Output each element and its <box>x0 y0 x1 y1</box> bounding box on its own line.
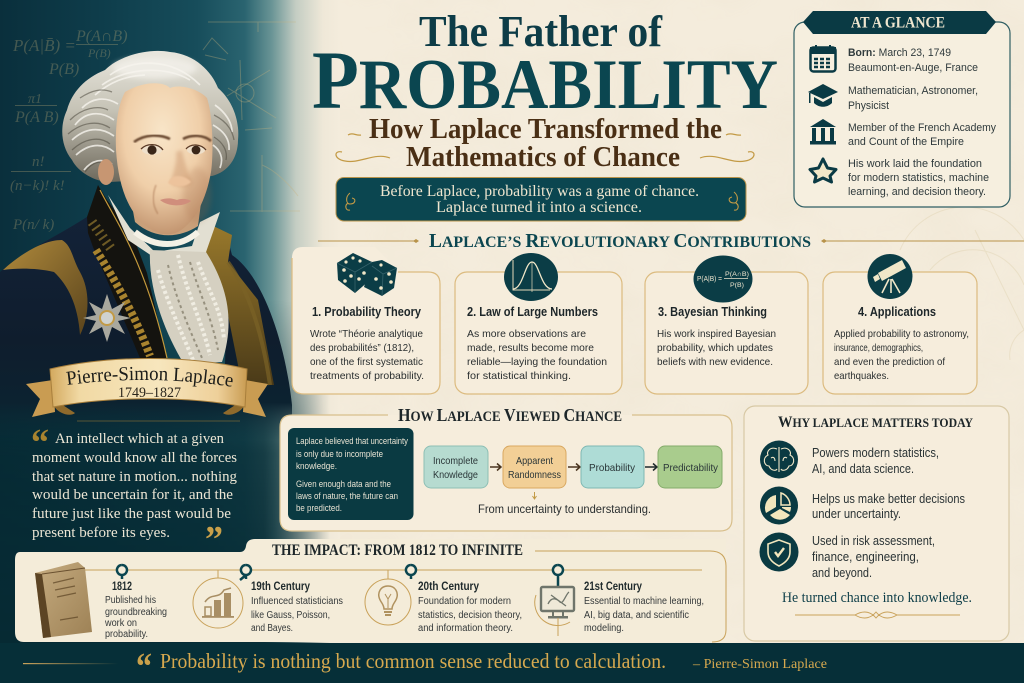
intro banner <box>336 178 746 221</box>
milestone 20th century <box>418 581 522 634</box>
faint mathematical formulas on chalkboard <box>10 28 128 233</box>
Laplace quote on left: An intellect which at a given <box>55 431 224 447</box>
cravat and lace <box>108 195 229 364</box>
milestone 1812 <box>104 581 167 640</box>
Laplace quote on left: moment would know all the forces <box>32 450 237 466</box>
flow step: predictability: Predictability <box>663 462 719 474</box>
timeline pin 1812 <box>117 565 127 579</box>
icon: telescope <box>868 254 912 299</box>
banner text: Laplace turned it into a science. <box>436 199 642 216</box>
title: 4. Applications <box>858 305 936 319</box>
glance text: Physicist <box>848 100 889 112</box>
flow step: probability: Probability <box>589 462 636 474</box>
banner ornaments <box>346 192 738 210</box>
title line two: PROBABILITY <box>312 34 778 126</box>
Laplace quote on left <box>31 422 237 561</box>
flow step: apparent randomness: Apparent <box>516 455 553 467</box>
flow step: probability <box>581 446 644 488</box>
list text: under uncertainty. <box>812 507 901 521</box>
body: Applied probability to astronomy, <box>834 329 969 340</box>
ribbon dates: 1749–1827 <box>118 385 181 401</box>
footer quotation: Probability is nothing but common sense reduced to calculation. <box>160 649 666 673</box>
flow step: apparent randomness: Randomness <box>508 469 561 481</box>
milestone 21st century <box>584 581 704 634</box>
explanation box: knowledge. <box>296 461 337 472</box>
icon: Bayes formula <box>694 256 752 302</box>
milestone 1812: 1812 <box>112 581 132 593</box>
milestone 1812: groundbreaking <box>105 607 167 618</box>
icon: brain <box>760 440 798 478</box>
body: des probabilités” (1812), <box>310 342 414 354</box>
glance text: His work laid the foundation <box>848 158 982 170</box>
footer quote band <box>0 643 1024 683</box>
list text: Used in risk assessment, <box>812 534 935 548</box>
book icon <box>35 562 92 638</box>
body: probability, which updates <box>657 342 773 354</box>
milestone 20th century: 20th Century <box>418 581 480 593</box>
ribbon header <box>803 11 996 34</box>
title: 2. Law of Large Numbers <box>467 305 598 319</box>
icon: academy building <box>810 119 836 144</box>
explanation box: laws of nature, the future can <box>296 491 398 502</box>
eyebrows <box>134 136 211 142</box>
explanation box: be predicted. <box>296 503 342 514</box>
milestone 1812: work on <box>104 618 137 629</box>
body: reliable—laying the foundation <box>467 356 607 368</box>
panel: bayesian thinking <box>645 256 808 394</box>
timeline pin 20th century <box>406 565 416 579</box>
milestone 1812: Published his <box>105 595 156 606</box>
mouth <box>160 198 191 205</box>
faint geometric sketches <box>203 22 1024 360</box>
Laplace quote on left: would be uncertain for it, and the <box>32 487 233 503</box>
flow step: apparent randomness <box>503 446 566 488</box>
faint mathematical formulas on chalkboard: P(A∩B) <box>75 28 128 45</box>
milestone 21st century: Essential to machine learning, <box>584 596 704 607</box>
icon: Bayes formula: P(B) <box>730 282 744 289</box>
icon: dice <box>337 253 397 296</box>
panel: the impact timeline <box>15 539 726 642</box>
background: parchment and dark teal wash <box>0 0 329 643</box>
footer attribution: – Pierre-Simon Laplace <box>692 657 827 672</box>
icon: computer monitor <box>535 587 574 636</box>
name ribbon <box>26 358 268 417</box>
list text: finance, engineering, <box>812 550 919 564</box>
gold lapel <box>205 222 274 385</box>
Laplace quote on left: that set nature in motion... nothing <box>32 469 237 485</box>
right coat sleeve fold highlight <box>228 262 270 385</box>
hair <box>62 51 238 182</box>
portrait of Pierre-Simon Laplace <box>0 51 292 440</box>
heading: revolutionary contributions <box>318 231 1024 252</box>
body <box>310 328 424 382</box>
icon: Bayes formula: P(A∩B) <box>725 271 749 278</box>
heading: revolutionary contributions: LAPLACE’S REVOLUTIONARY CONTRIBUTIONS <box>429 231 811 252</box>
timeline axis <box>83 569 702 571</box>
flow caption: From uncertainty to understanding. <box>478 502 651 516</box>
title <box>312 7 778 173</box>
explanation box: is only due to incomplete <box>296 449 383 460</box>
title: 3. Bayesian Thinking <box>658 305 767 319</box>
body: beliefs with new evidence. <box>657 356 773 368</box>
banner text <box>380 183 699 216</box>
icon: calendar <box>810 45 836 72</box>
heading: THE IMPACT: FROM 1812 TO INFINITE <box>272 542 523 559</box>
body: made, results become more <box>467 342 594 354</box>
arrow <box>568 464 580 470</box>
panel: probability theory <box>292 247 440 394</box>
glance text: for modern statistics, machine <box>848 172 989 184</box>
medal star <box>83 294 131 342</box>
list text: and beyond. <box>812 566 872 580</box>
flow step: predictability <box>658 446 722 488</box>
glance text: Member of the French Academy <box>848 122 996 134</box>
Laplace quote on left: future just like the past would be <box>32 506 231 522</box>
list text <box>812 446 965 580</box>
body: Wrote “Théorie analytique <box>310 328 423 340</box>
heading rule and right border <box>535 551 726 642</box>
milestone 19th century: 19th Century <box>251 581 311 593</box>
milestone 1812: probability. <box>105 629 148 640</box>
list text: Helps us make better decisions <box>812 492 965 506</box>
milestone 20th century: statistics, decision theory, <box>418 610 522 621</box>
body: for statistical thinking. <box>467 370 571 382</box>
milestone 21st century: AI, big data, and scientific <box>584 610 689 621</box>
list text: AI, and data science. <box>812 462 914 476</box>
glance text <box>848 47 996 198</box>
body <box>467 328 607 382</box>
faint mathematical formulas on chalkboard: π1 <box>28 92 42 107</box>
body: treatments of probability. <box>310 370 424 382</box>
panel: why Laplace matters today <box>744 406 1009 641</box>
faint mathematical formulas on chalkboard: P(B) <box>48 61 79 78</box>
milestone 20th century: and information theory. <box>418 623 513 634</box>
icon: star <box>810 159 836 182</box>
flow step: incomplete knowledge: Knowledge <box>433 469 478 481</box>
glance text: Born: March 23, 1749 <box>848 47 951 59</box>
icon: pie chart <box>760 486 798 524</box>
icon: graduation cap <box>808 84 838 107</box>
panel: applications <box>823 254 977 394</box>
body: earthquakes. <box>834 370 889 382</box>
header text: AT A GLANCE <box>851 14 945 32</box>
title line one: The Father of <box>419 7 663 56</box>
faint mathematical formulas on chalkboard: P(A|B̄) = <box>12 36 76 55</box>
glance text: Mathematician, Astronomer, <box>848 85 978 97</box>
body: His work inspired Bayesian <box>657 328 776 340</box>
Laplace quote on left: ” <box>205 519 223 561</box>
ornament <box>795 612 960 618</box>
panel: at a glance <box>794 11 1010 207</box>
panel: how Laplace viewed chance <box>280 405 732 531</box>
faint mathematical formulas on chalkboard: (n−k)! k! <box>10 178 65 194</box>
Laplace quote on left: present before its eyes. <box>32 525 170 541</box>
icon: growth bar chart <box>193 570 243 628</box>
explanation box <box>288 428 414 520</box>
flow step: incomplete knowledge: Incomplete <box>433 455 478 467</box>
milestone 19th century: like Gauss, Poisson, <box>251 610 330 621</box>
icon: shield <box>760 532 798 572</box>
eyes <box>141 145 206 155</box>
glance text: Beaumont-en-Auge, France <box>848 62 978 74</box>
icon: lightbulb <box>365 570 411 625</box>
subtitle line one: How Laplace Transformed the <box>369 114 722 145</box>
timeline pin 21st century <box>553 565 563 586</box>
faint mathematical formulas on chalkboard: P(n/ k) <box>12 217 54 233</box>
flow step: incomplete knowledge <box>424 446 488 488</box>
faint mathematical formulas on chalkboard: n! <box>32 154 44 170</box>
milestone 19th century: and Bayes. <box>251 623 293 634</box>
embroidered collar <box>87 185 167 358</box>
neck <box>130 195 202 235</box>
Laplace quote on left: “ <box>31 422 49 464</box>
heading: WHY LAPLACE MATTERS TODAY <box>778 414 974 431</box>
banner text: Before Laplace, probability was a game of chance. <box>380 183 699 200</box>
body: As more observations are <box>467 328 586 340</box>
panel: law of large numbers <box>455 253 622 394</box>
milestone 19th century: Influenced statisticians <box>251 596 343 607</box>
body: and even the prediction of <box>834 356 945 368</box>
subtitle line two: Mathematics of Chance <box>406 142 680 173</box>
ear <box>98 159 114 185</box>
faint mathematical formulas on chalkboard: P(B) <box>87 46 111 60</box>
body: one of the first systematic <box>310 356 423 368</box>
milestone 20th century: Foundation for modern <box>418 596 511 607</box>
small arrow <box>532 492 536 499</box>
milestone 21st century: modeling. <box>584 623 624 634</box>
ribbon name text <box>67 380 233 387</box>
subtitle flourishes <box>336 134 754 161</box>
left rule under ribbon <box>77 420 240 422</box>
closing line: He turned chance into knowledge. <box>782 590 972 606</box>
body <box>834 329 969 382</box>
glance text: and Count of the Empire <box>848 136 964 148</box>
explanation box: Laplace believed that uncertainty <box>296 436 408 447</box>
icon: Bayes formula: P(A|B) = <box>697 274 723 283</box>
face <box>116 83 212 234</box>
arrow <box>490 464 501 470</box>
coat <box>0 190 292 440</box>
body: insurance, demographics, <box>834 342 923 354</box>
list text: Powers modern statistics, <box>812 446 939 460</box>
heading: HOW LAPLACE VIEWED CHANCE <box>398 405 622 425</box>
name ribbon: Pierre-Simon Laplace <box>66 366 233 387</box>
arrow <box>645 464 657 470</box>
timeline pin 19th century <box>240 565 251 580</box>
glance text: learning, and decision theory. <box>848 186 986 198</box>
epaulette <box>3 240 88 335</box>
title: 1. Probability Theory <box>312 305 421 319</box>
faint mathematical formulas on chalkboard: P(A B) <box>14 109 59 126</box>
explanation box: Given enough data and the <box>296 479 391 490</box>
footer left rule <box>23 663 118 664</box>
milestone 19th century <box>251 581 343 634</box>
milestone 21st century: 21st Century <box>584 581 642 593</box>
body <box>657 328 776 368</box>
icon: bell curve <box>504 253 558 301</box>
